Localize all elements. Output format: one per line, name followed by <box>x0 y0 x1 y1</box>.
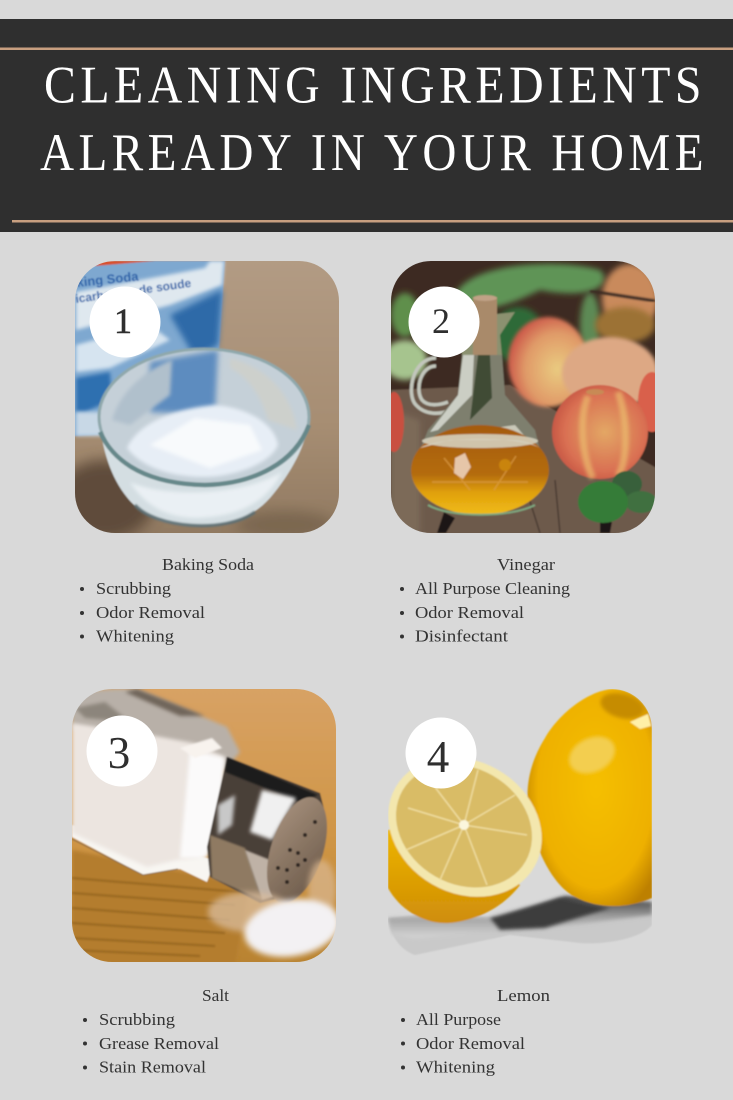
header banner <box>0 19 733 232</box>
list: vinegar uses <box>400 579 570 646</box>
apples <box>602 264 658 332</box>
half lemon cut face <box>388 760 544 898</box>
photo: vinegar and apples <box>391 261 655 533</box>
list: salt uses: Grease Removal <box>99 1034 219 1053</box>
list: salt uses: Scrubbing <box>99 1010 175 1029</box>
spilled salt <box>208 892 292 932</box>
label: salt: Salt <box>202 986 229 1005</box>
shadow <box>388 896 652 955</box>
number badge 2 <box>408 286 480 358</box>
photo: baking soda bowl: icarbonate de soude <box>74 276 192 306</box>
cap <box>207 757 325 903</box>
bottle <box>411 358 450 413</box>
title <box>40 56 708 182</box>
list: salt uses <box>83 1010 219 1076</box>
label: baking soda: Baking Soda <box>162 555 255 574</box>
number badge 4: 4 <box>427 732 449 782</box>
list: baking soda uses: Whitening <box>96 626 174 646</box>
glass <box>72 689 240 770</box>
list: lemon uses: Odor Removal <box>416 1034 525 1053</box>
list: vinegar uses: All Purpose Cleaning <box>415 579 570 598</box>
panel: lemon <box>363 689 652 1076</box>
number badge 3 <box>86 716 158 786</box>
number badge 3: 3 <box>108 728 130 778</box>
list: lemon uses: Whitening <box>416 1058 495 1076</box>
list: vinegar uses: Disinfectant <box>415 626 508 646</box>
panel: salt <box>68 685 344 1076</box>
panel: vinegar <box>383 255 666 646</box>
photo: lemons <box>363 689 652 955</box>
list: baking soda uses <box>80 579 205 646</box>
list: lemon uses <box>401 1010 525 1076</box>
number badge 1 <box>90 286 160 358</box>
salt <box>72 723 225 867</box>
whole lemon <box>528 689 652 906</box>
photo: baking soda bowl: king Soda <box>76 268 140 290</box>
photo: salt shaker <box>68 685 344 965</box>
label: vinegar: Vinegar <box>497 555 556 574</box>
list: salt uses: Stain Removal <box>99 1058 206 1076</box>
bowl glass <box>102 440 304 526</box>
number badge 1: 1 <box>114 301 132 341</box>
list: vinegar uses: Odor Removal <box>415 603 524 622</box>
leaves <box>612 471 642 497</box>
list: baking soda uses: Odor Removal <box>96 603 205 622</box>
list: lemon uses: All Purpose <box>416 1010 501 1029</box>
photo: baking soda bowl <box>75 261 339 533</box>
number badge 4 <box>406 718 476 788</box>
list: baking soda uses: Scrubbing <box>96 579 171 598</box>
panel: baking soda <box>75 261 339 645</box>
number badge 2: 2 <box>432 301 450 341</box>
half lemon body <box>388 820 520 923</box>
label: lemon: Lemon <box>497 986 550 1005</box>
